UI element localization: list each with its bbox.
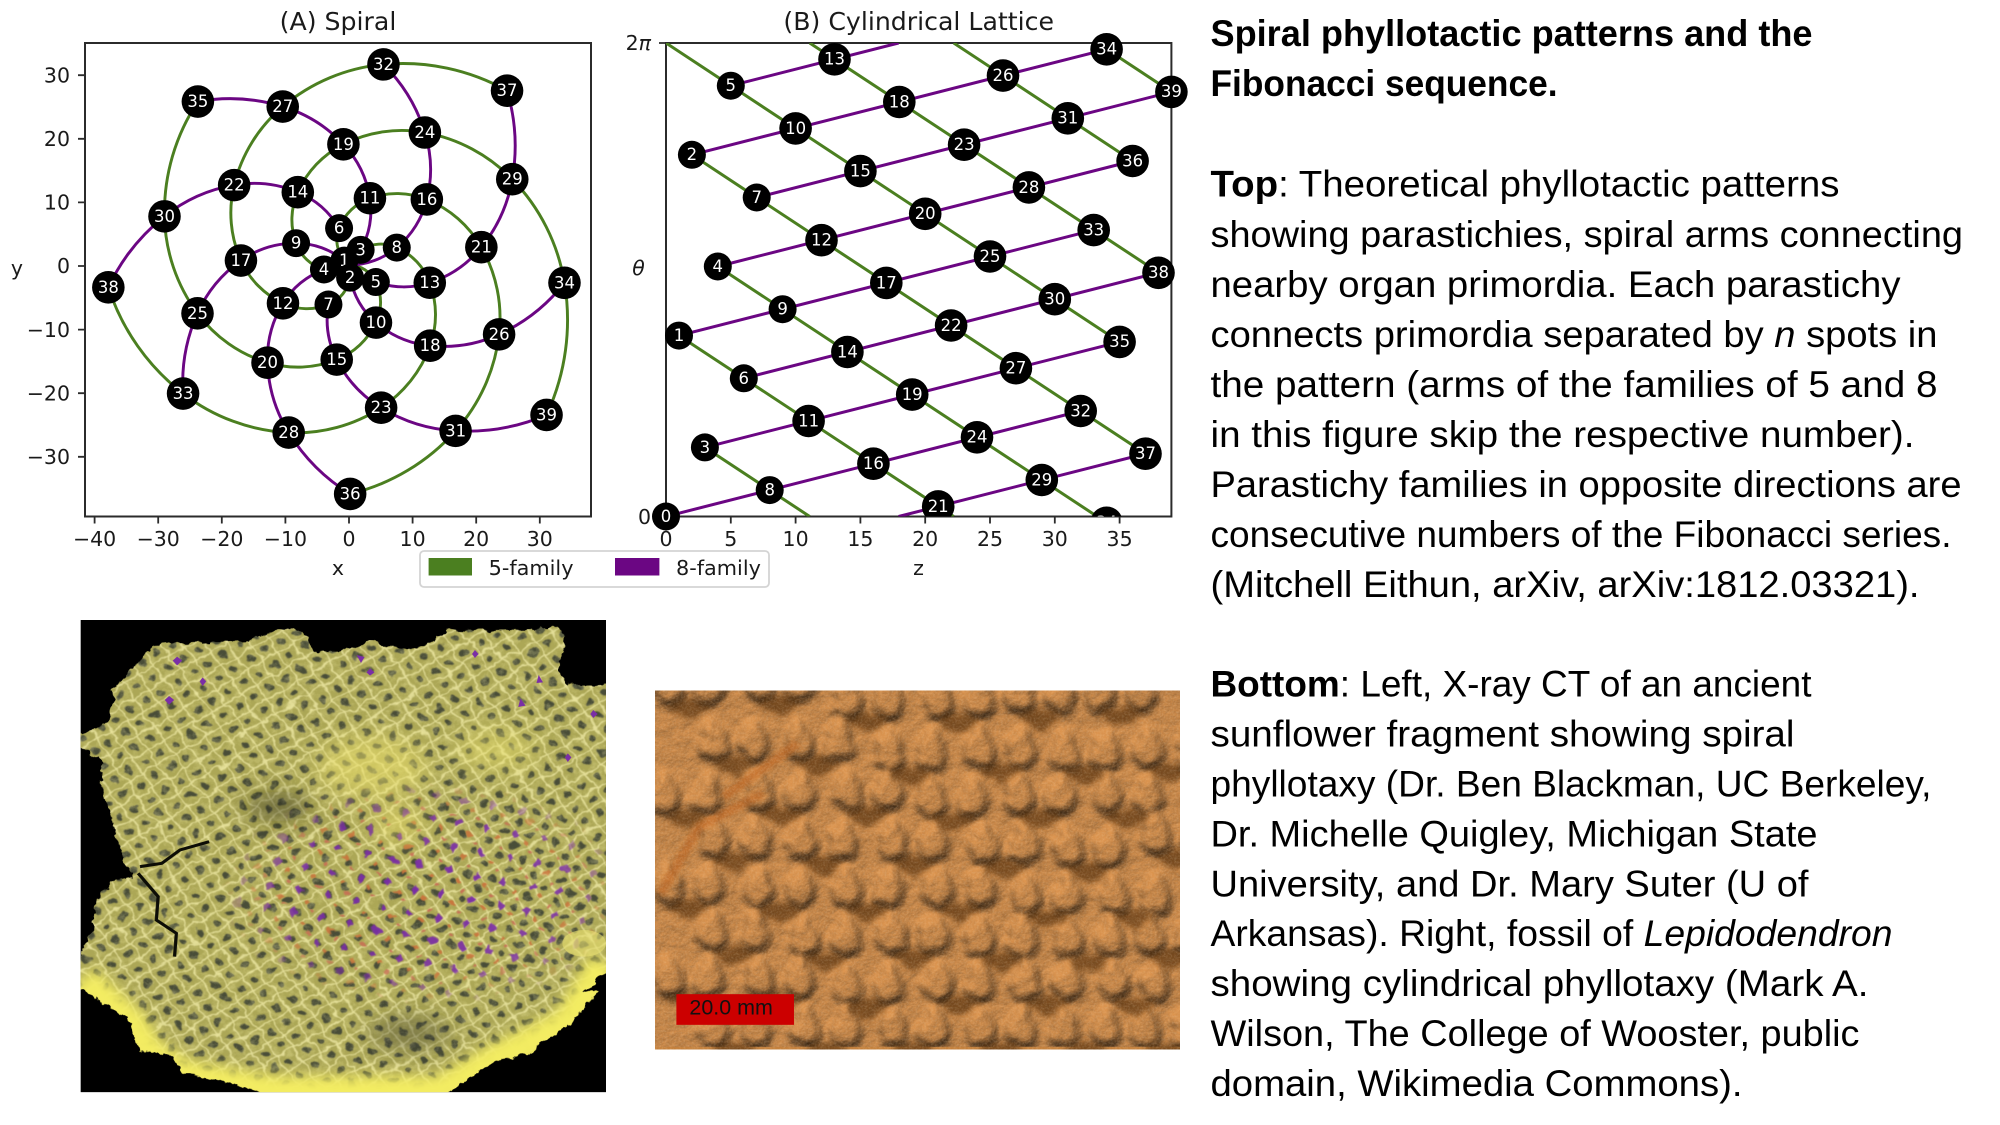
- text: Bottom description: Dr. Michelle Quigley, Michigan State: [1210, 813, 1818, 854]
- numbered primordia A: 1: [339, 251, 350, 270]
- numbered primordia A: 28: [278, 423, 299, 442]
- text: Bottom description: [1210, 664, 1932, 1104]
- x axis ticks and labels B: 30: [1042, 527, 1068, 551]
- numbered primordia B: 14: [837, 342, 858, 362]
- fossil pits: [663, 696, 1199, 1062]
- text: Top description: consecutive numbers of the Fibonacci series.: [1210, 514, 1952, 555]
- legend: 5-family: [489, 556, 574, 580]
- text: Bottom description: Arkansas). Right, fossil of Lepidodendron: [1210, 913, 1892, 954]
- x axis ticks and labels A: 30: [527, 527, 553, 551]
- numbered primordia A: 5: [371, 273, 381, 292]
- numbered primordia A: 26: [489, 325, 510, 344]
- bright rim: [82, 963, 606, 1092]
- axes frame B: [666, 43, 1171, 516]
- numbered primordia B: 30: [1044, 290, 1065, 308]
- numbered primordia A: 22: [224, 176, 245, 195]
- y axis ticks and labels B: [626, 31, 666, 529]
- scale bar: 20.0 mm: 20.0 mm: [689, 995, 773, 1019]
- text: Top description: nearby organ primordia. Each parastichy: [1210, 264, 1901, 305]
- y axis ticks and labels A: −10: [27, 318, 70, 342]
- numbered primordia A: 32: [373, 55, 394, 74]
- numbered primordia B: 15: [850, 162, 871, 180]
- numbered primordia B: 24: [966, 428, 988, 446]
- numbered primordia B: 22: [941, 316, 962, 335]
- text: Bottom description: sunflower fragment showing spiral: [1210, 714, 1794, 755]
- numbered primordia A: 19: [333, 135, 354, 154]
- numbered primordia B: 19: [902, 385, 923, 404]
- numbered primordia B: 39: [1161, 82, 1182, 101]
- text: Top description: showing parastichies, spiral arms connecting: [1210, 214, 1963, 255]
- numbered primordia A: 21: [471, 238, 492, 257]
- legend swatch: 8-family: [615, 558, 659, 576]
- numbered primordia A: 12: [272, 294, 293, 313]
- numbered primordia B: 21: [928, 497, 949, 516]
- numbered primordia B: 26: [992, 66, 1014, 85]
- numbered primordia A: 24: [414, 123, 435, 142]
- cracks and scattered specks: [138, 842, 209, 957]
- numbered primordia B: 7: [751, 188, 762, 207]
- arcs: 5-family: [108, 64, 568, 494]
- legend: [420, 551, 769, 587]
- scale bar: 20.0 mm: [676, 994, 794, 1025]
- y axis ticks and labels A: −20: [27, 382, 70, 406]
- numbered primordia A: 34: [554, 273, 575, 292]
- text: heading: [1210, 13, 1812, 104]
- fossil relief: [650, 660, 1212, 1047]
- numbered primordia A: 33: [173, 384, 194, 403]
- chart: (A) Spiral: [11, 7, 591, 580]
- x axis ticks and labels A: 10: [400, 527, 426, 551]
- text: Top description: Top: Theoretical phyllotactic patterns: [1210, 164, 1840, 205]
- text: heading: Fibonacci sequence.: [1210, 63, 1558, 104]
- x axis ticks and labels A: −30: [137, 527, 180, 551]
- text: Bottom description: phyllotaxy (Dr. Ben Blackman, UC Berkeley,: [1210, 764, 1932, 804]
- y axis ticks and labels A: 10: [44, 190, 70, 214]
- numbered primordia B: 31: [1057, 108, 1078, 128]
- x axis ticks and labels B: 10: [783, 527, 809, 551]
- numbered primordia A: 25: [187, 304, 208, 323]
- numbered primordia A: 9: [291, 234, 301, 253]
- numbered primordia A: 27: [272, 97, 293, 116]
- numbered primordia A: 38: [98, 278, 119, 297]
- numbered primordia A: 13: [419, 273, 440, 292]
- x axis ticks and labels B: z: [913, 556, 924, 580]
- x axis ticks and labels B: 35: [1107, 527, 1133, 551]
- text: Top description: connects primordia separated by n spots in: [1210, 314, 1938, 355]
- numbered primordia A: 18: [420, 336, 441, 355]
- y axis ticks and labels A: y: [11, 256, 23, 280]
- numbered primordia A: 2: [345, 268, 355, 287]
- numbered primordia B: 8: [764, 480, 775, 500]
- lattice lines: 8-family: [666, 43, 1171, 516]
- numbered primordia B: 3: [700, 438, 710, 457]
- numbered primordia B: 33: [1083, 220, 1104, 240]
- numbered primordia A: 11: [359, 189, 380, 208]
- numbered primordia A: 10: [365, 313, 386, 332]
- numbered primordia A: 16: [416, 190, 437, 209]
- numbered primordia B: 37: [1135, 444, 1156, 463]
- spiral plot: [92, 48, 581, 510]
- numbered primordia A: 39: [536, 405, 557, 424]
- y axis ticks and labels A: [11, 64, 85, 469]
- numbered primordia B: 32: [1070, 402, 1091, 420]
- y axis ticks and labels B: 0: [638, 505, 651, 529]
- y axis ticks and labels A: −30: [27, 445, 70, 469]
- numbered primordia B: 23: [954, 135, 975, 154]
- numbered primordia B: 34: [1096, 513, 1117, 532]
- numbered primordia A: 30: [154, 207, 175, 226]
- x axis ticks and labels B: [659, 516, 1133, 580]
- x axis ticks and labels B: 20: [912, 527, 938, 551]
- text: Bottom description: Bottom: Left, X-ray CT of an ancient: [1210, 664, 1812, 705]
- y axis ticks and labels B: 2π: [626, 31, 652, 55]
- numbered primordia B: 36: [1122, 152, 1143, 170]
- numbered primordia A: 15: [326, 350, 347, 369]
- legend swatch: 5-family: [429, 558, 472, 576]
- numbered primordia A: 8: [392, 238, 402, 257]
- y axis ticks and labels A: 30: [44, 64, 70, 88]
- x axis ticks and labels A: −40: [73, 527, 116, 551]
- numbered primordia B: 38: [1148, 263, 1169, 282]
- x axis ticks and labels A: [73, 516, 553, 580]
- title: (B) Cylindrical Lattice: (B) Cylindrical Lattice: [783, 7, 1054, 36]
- x axis ticks and labels A: x: [332, 556, 344, 580]
- text: Bottom description: showing cylindrical phyllotaxy (Mark A.: [1210, 963, 1868, 1004]
- x axis ticks and labels B: 25: [977, 527, 1003, 551]
- text: Top description: the pattern (arms of the families of 5 and 8: [1210, 364, 1938, 405]
- numbered primordia A: 35: [187, 92, 208, 111]
- text: Top description: [1210, 164, 1963, 605]
- numbered primordia B: 13: [824, 50, 845, 68]
- legend: 8-family: [676, 556, 761, 580]
- text: Top description: Parastichy families in opposite directions are: [1210, 464, 1962, 505]
- text: Top description: (Mitchell Eithun, arXiv, arXiv:1812.03321).: [1210, 564, 1920, 605]
- photo: Lepidodendron fossil: [655, 690, 1180, 1050]
- numbered primordia A: 20: [257, 353, 278, 372]
- x axis ticks and labels A: −10: [264, 527, 307, 551]
- y axis ticks and labels B: θ: [632, 256, 645, 280]
- text: Top description: in this figure skip the respective number).: [1210, 414, 1914, 455]
- numbered primordia B: 25: [980, 247, 1000, 266]
- numbered primordia B: [652, 33, 1188, 539]
- numbered primordia B: 5: [726, 76, 736, 95]
- numbered primordia A: 7: [323, 295, 334, 314]
- numbered primordia B: 9: [777, 300, 788, 318]
- numbered primordia A: 36: [340, 484, 361, 503]
- numbered primordia B: 17: [876, 274, 897, 292]
- numbered primordia B: 16: [863, 454, 884, 473]
- numbered primordia A: [92, 48, 581, 510]
- y axis ticks and labels A: 20: [44, 127, 70, 151]
- text: Bottom description: Wilson, The College of Wooster, public: [1210, 1013, 1860, 1054]
- axes frame A: [85, 43, 591, 516]
- lattice lines: 5-family: [666, 43, 1171, 516]
- numbered primordia A: 17: [230, 251, 251, 270]
- x axis ticks and labels A: −20: [200, 527, 243, 551]
- numbered primordia A: 6: [334, 219, 344, 238]
- numbered primordia B: 20: [915, 204, 936, 223]
- title: (A) Spiral: (A) Spiral: [280, 7, 396, 36]
- numbered primordia A: 37: [497, 81, 518, 100]
- numbered primordia A: 3: [355, 240, 366, 259]
- x axis ticks and labels B: 0: [659, 527, 673, 551]
- numbered primordia A: 31: [445, 421, 466, 440]
- numbered primordia B: 11: [798, 412, 819, 430]
- numbered primordia A: 23: [371, 398, 392, 417]
- numbered primordia B: 27: [1005, 358, 1026, 378]
- photo: X-ray CT of sunflower fragment: [80, 620, 606, 1092]
- numbered primordia B: 12: [811, 230, 832, 250]
- numbered primordia B: 35: [1109, 332, 1130, 351]
- x axis ticks and labels B: 15: [847, 527, 873, 551]
- numbered primordia B: 18: [889, 92, 910, 112]
- bright centre and dark smudges: [246, 730, 537, 1048]
- numbered primordia B: 6: [739, 369, 749, 388]
- text: heading: Spiral phyllotactic patterns and the: [1210, 13, 1812, 54]
- chart: (B) Cylindrical Lattice: [626, 7, 1188, 580]
- numbered primordia B: 34: [1096, 40, 1117, 58]
- x axis ticks and labels B: 5: [724, 527, 737, 551]
- numbered primordia A: 14: [287, 183, 308, 202]
- y axis ticks and labels A: 0: [57, 254, 70, 278]
- numbered primordia B: 0: [661, 507, 671, 526]
- x axis ticks and labels A: 20: [463, 527, 489, 551]
- numbered primordia B: 28: [1018, 178, 1039, 197]
- numbered primordia B: 1: [674, 326, 684, 345]
- text: Bottom description: University, and Dr. Mary Suter (U of: [1210, 863, 1809, 904]
- x axis ticks and labels A: 0: [342, 527, 356, 551]
- numbered primordia B: 4: [713, 257, 723, 276]
- numbered primordia A: 29: [502, 170, 523, 189]
- numbered primordia B: 29: [1031, 470, 1052, 490]
- numbered primordia B: 2: [687, 145, 697, 164]
- text: Bottom description: domain, Wikimedia Commons).: [1210, 1063, 1742, 1104]
- numbered primordia A: 4: [319, 260, 329, 279]
- arcs: 8-family: [108, 64, 564, 494]
- numbered primordia B: 10: [785, 119, 806, 138]
